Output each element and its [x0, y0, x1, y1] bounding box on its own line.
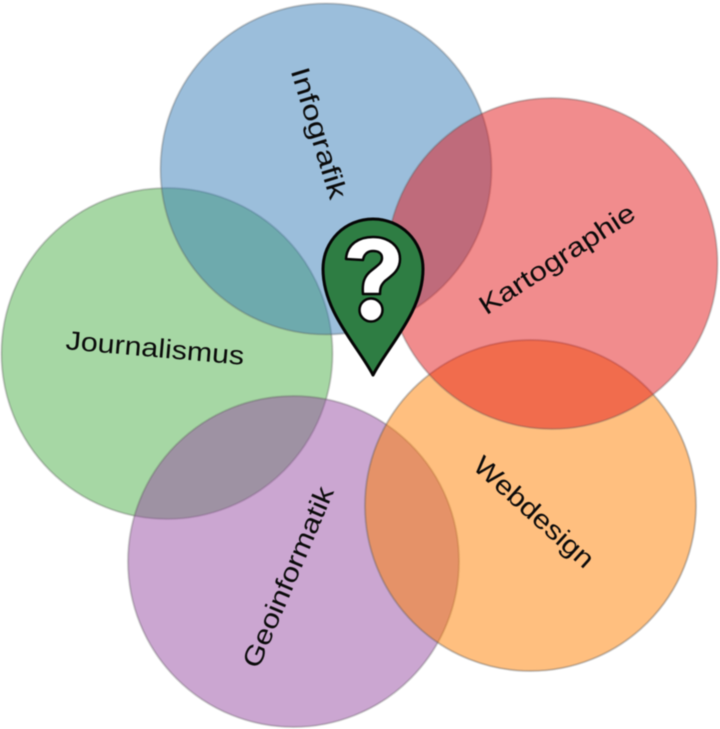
- label: Kartographie: Kartographie: [473, 197, 641, 321]
- circle: Geoinformatik: [128, 396, 459, 727]
- circle: Webdesign: [365, 340, 696, 671]
- label: Geoinformatik: Geoinformatik: [236, 481, 340, 672]
- label: Webdesign: Webdesign: [467, 450, 601, 574]
- circle: Journalismus: [2, 188, 332, 519]
- circle: Infografik: [160, 4, 492, 334]
- question mark: [346, 237, 400, 294]
- pin body: [323, 219, 423, 375]
- label: Infografik: Infografik: [285, 64, 353, 203]
- icon: map pin with question mark: [323, 219, 423, 375]
- circle: Kartographie: [386, 98, 718, 429]
- label: Journalismus: Journalismus: [65, 325, 245, 371]
- question mark dot: [360, 298, 382, 322]
